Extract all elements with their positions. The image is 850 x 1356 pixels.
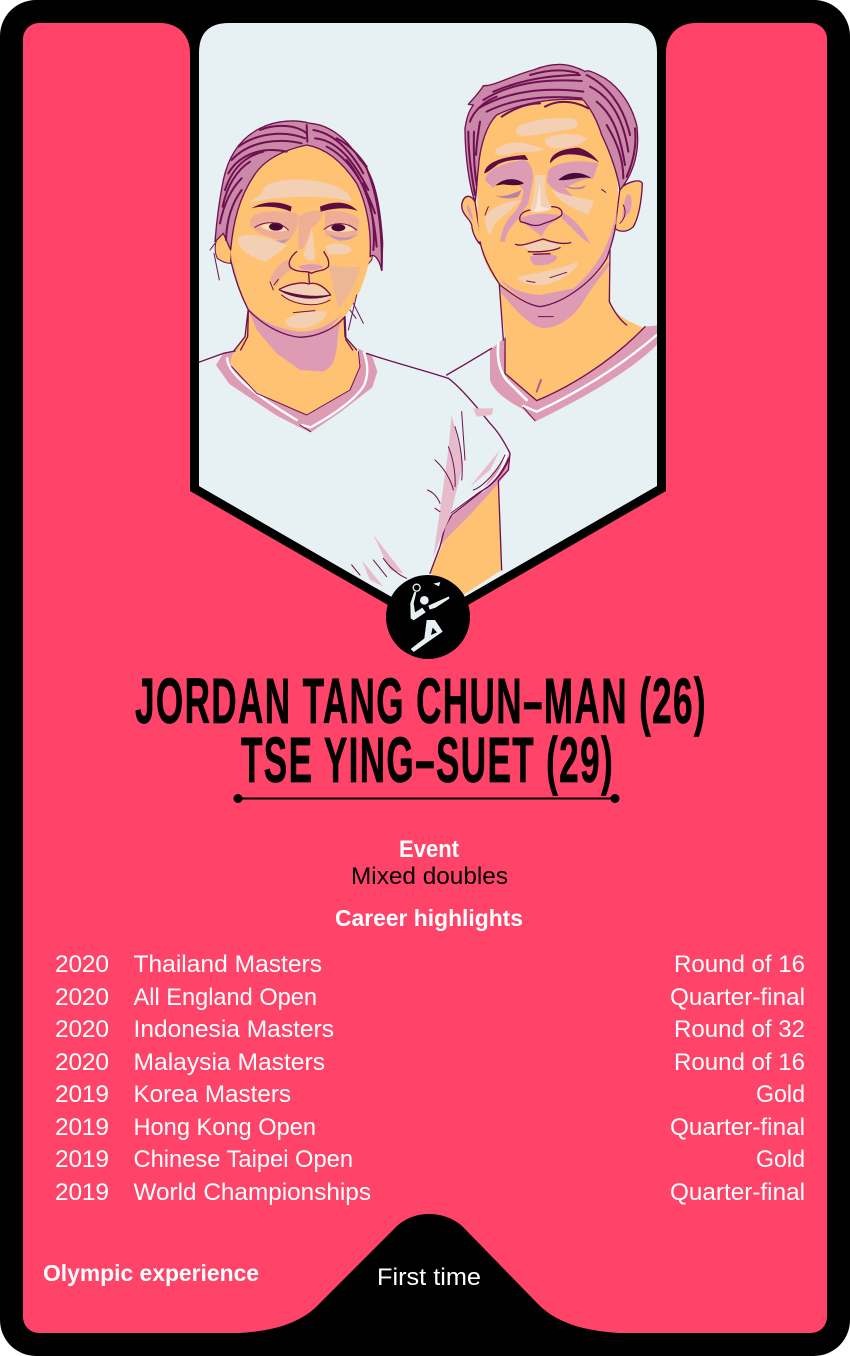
man face — [477, 100, 618, 283]
woman brows — [252, 202, 292, 212]
career highlights table: Round of 16 — [674, 1049, 805, 1076]
woman neck shadow — [250, 313, 343, 372]
career highlights table: Thailand Masters — [134, 951, 322, 978]
woman shirt — [199, 486, 376, 588]
woman face — [231, 145, 370, 337]
career highlights table: Round of 16 — [674, 951, 805, 978]
sport badge — [386, 575, 470, 659]
man left ear — [462, 196, 482, 245]
icon: badminton player — [410, 582, 449, 652]
career highlights table: Round of 32 — [674, 1016, 805, 1043]
woman neck — [230, 307, 360, 415]
man nose and mouth lines — [520, 207, 562, 225]
woman arm — [430, 480, 502, 595]
man hair — [465, 64, 638, 202]
woman mouth — [282, 284, 331, 304]
career highlights table: Hong Kong Open — [134, 1114, 316, 1141]
man neck shadow — [500, 262, 609, 328]
career highlights table: World Championships — [134, 1179, 371, 1206]
man right ear — [615, 181, 642, 231]
title — [135, 665, 707, 796]
woman face shading — [250, 211, 298, 242]
woman hair — [215, 121, 383, 270]
woman hair strands — [220, 134, 305, 240]
career highlights table: 2019 — [55, 1179, 109, 1206]
career highlights table: Gold — [756, 1146, 805, 1173]
man eyes — [495, 179, 524, 186]
career highlights table: Gold — [756, 1081, 805, 1108]
career highlights table: Malaysia Masters — [134, 1049, 325, 1076]
career highlights table: Indonesia Masters — [134, 1016, 334, 1043]
woman highlights — [250, 180, 351, 203]
event value: Mixed doubles — [351, 863, 508, 890]
career highlights table: 2020 — [55, 1016, 109, 1043]
career highlights table: 2020 — [55, 951, 109, 978]
woman right ear — [368, 256, 373, 265]
career highlights table: Korea Masters — [134, 1081, 291, 1108]
portrait illustration — [187, 23, 660, 623]
career highlights table: Quarter-final — [670, 1114, 805, 1141]
badge circle — [386, 575, 470, 659]
career highlights table: All England Open — [134, 984, 317, 1011]
man hair strands — [470, 70, 588, 122]
woman jaw line — [231, 260, 345, 337]
woman collar — [216, 348, 377, 432]
man brows — [484, 155, 528, 173]
woman sleeve band — [440, 452, 509, 547]
career highlights table — [55, 951, 805, 1206]
woman eyes — [260, 223, 355, 232]
career highlights table: Chinese Taipei Open — [134, 1146, 353, 1173]
career highlights table: 2019 — [55, 1146, 109, 1173]
title underline — [234, 794, 620, 803]
career highlights table: 2020 — [55, 1049, 109, 1076]
olympic experience value: First time — [377, 1264, 481, 1291]
career highlights table: 2020 — [55, 984, 109, 1011]
woman nose — [298, 264, 323, 270]
man highlights — [516, 118, 578, 136]
career highlights table: Quarter-final — [670, 984, 805, 1011]
career highlights heading: Career highlights — [335, 905, 523, 931]
event heading: Event — [399, 836, 459, 863]
man neck and shirt — [447, 247, 660, 422]
olympic experience label: Olympic experience — [43, 1260, 259, 1286]
woman shirt folds — [362, 408, 500, 587]
bottom tab — [225, 1214, 635, 1334]
career highlights table: Quarter-final — [670, 1179, 805, 1206]
woman left ear — [215, 232, 232, 263]
portrait frame — [160, 23, 696, 628]
career highlights table: 2019 — [55, 1081, 109, 1108]
man — [447, 64, 660, 422]
woman sleeve lines — [430, 378, 510, 573]
man collar — [490, 325, 660, 422]
man face shading — [485, 160, 533, 242]
man jaw line — [480, 225, 616, 307]
woman — [187, 121, 510, 595]
career highlights table: 2019 — [55, 1114, 109, 1141]
